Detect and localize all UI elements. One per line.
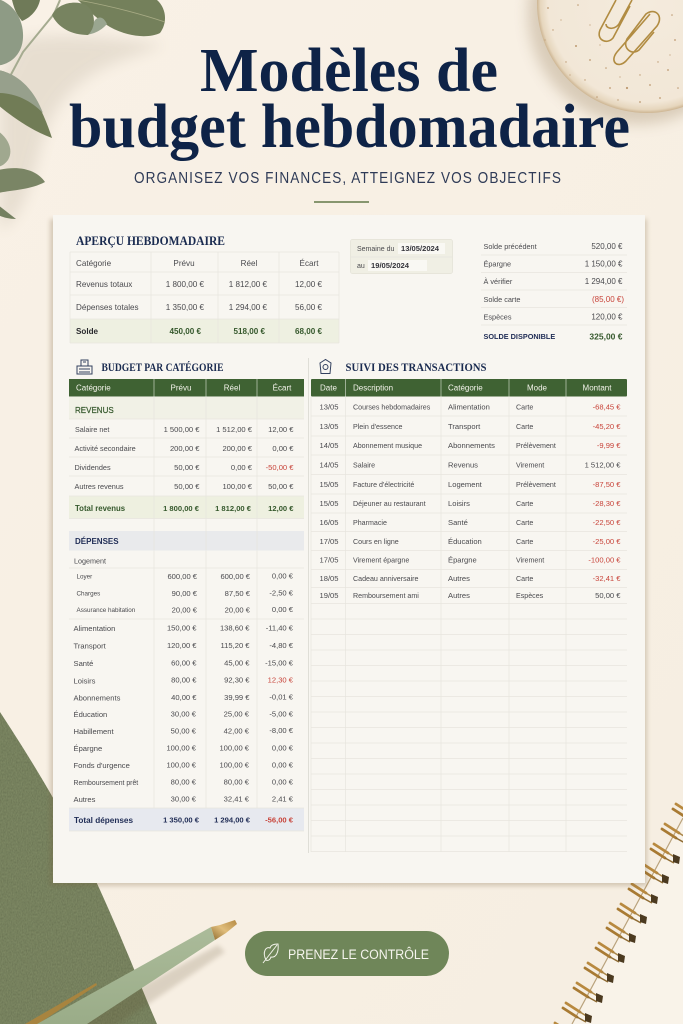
expenses section: 600,00 € [220,572,251,581]
expenses section: -2,50 € [269,588,294,598]
title: budget hebdomadaire [69,93,630,161]
revenue section: 0,00 € [231,463,253,472]
balance summary: 120,00 € [591,312,623,322]
transactions rows: Carte [516,404,533,412]
expenses section: 100,00 € [219,744,250,752]
expenses section: DÉPENSES [75,537,119,546]
budget table header: Prévu [171,384,191,392]
balance summary: Solde carte [484,295,520,304]
call to action button [245,931,449,976]
transactions rows: Virement [516,556,544,564]
expenses section: -5,00 € [269,710,294,718]
overview table: 56,00 € [295,303,322,312]
expenses section: Remboursement prêt [74,780,138,787]
overview table: Dépenses totales [76,303,139,312]
icon: budget building [77,360,92,374]
balance summary [481,242,627,342]
overview table: 68,00 € [295,327,322,336]
transactions rows: -87,50 € [593,480,621,489]
overview table: 1 294,00 € [229,303,267,312]
expenses section: Transport [74,642,107,650]
expenses section: -0,01 € [269,692,294,702]
expenses section: 20,00 € [172,606,198,614]
transactions rows: 13/05 [320,402,339,412]
transactions rows: Courses hebdomadaires [353,404,431,412]
expenses section: 45,00 € [224,658,250,668]
expenses section: 600,00 € [167,572,198,581]
overview table: 450,00 € [169,327,201,336]
paper sheet [50,215,647,886]
transactions rows: 50,00 € [595,591,621,600]
transactions rows: Alimentation [448,402,490,412]
transactions rows: Épargne [448,556,477,564]
revenue section: 12,00 € [268,425,294,434]
expenses section: 30,00 € [171,710,197,718]
icon: house with coin [320,360,331,374]
week date box: Semaine du [357,246,394,253]
plate with paper clips [528,0,683,124]
transactions rows: -68,45 € [593,402,621,412]
expenses section: 1 294,00 € [214,816,251,824]
budget table header: Écart [273,384,292,392]
transactions rows: Déjeuner au restaurant [353,500,426,508]
expenses section: 138,60 € [220,624,250,632]
heading: budget par catégorie: BUDGET PAR CATÉGORIE [102,360,224,374]
expenses section: 100,00 € [166,760,197,770]
expenses section: 120,00 € [167,641,197,650]
expenses section: Abonnements [74,694,121,702]
transactions rows: Autres [448,591,470,600]
revenue section: 200,00 € [222,444,253,453]
budget table header: Catégorie [76,384,111,392]
transactions rows: 1 512,00 € [585,460,621,470]
transactions rows: -45,20 € [593,422,621,431]
transactions rows: Carte [516,575,533,583]
transactions rows: Prélèvement [516,481,556,489]
expenses section: 50,00 € [171,726,197,736]
revenue section: Dividendes [74,463,111,472]
transactions rows: 15/05 [320,480,339,489]
balance summary: 520,00 € [591,242,623,251]
expenses section: 0,00 € [272,760,294,770]
transactions rows: Pharmacie [353,519,387,527]
overview table: Prévu [173,259,195,268]
revenue section: 1 812,00 € [215,504,252,513]
expenses section: 92,30 € [224,676,250,684]
transactions rows: Prélèvement [516,442,556,450]
expenses section: 25,00 € [224,710,250,718]
budget table header: Réel [224,384,240,392]
expenses section: 150,00 € [167,624,197,632]
expenses section: 90,00 € [172,589,198,598]
transactions rows [320,402,621,600]
expenses section: Alimentation [74,624,115,633]
transactions rows: -32,41 € [593,574,621,583]
week date box: 13/05/2024 [401,244,440,253]
transactions grid [311,397,627,852]
revenue section: Activité secondaire [74,444,136,453]
balance summary: (85,00 €) [592,295,624,304]
transactions rows: Carte [516,423,533,431]
title [69,37,630,161]
transactions rows: Autres [448,574,470,583]
expenses section: 30,00 € [171,794,197,804]
revenue section: 1 500,00 € [164,425,200,434]
transactions header: Catégorie [448,384,483,392]
revenue section: 1 800,00 € [163,504,200,513]
expenses section: Santé [74,659,93,668]
transactions rows: 17/05 [320,537,339,546]
transactions rows: -28,30 € [593,499,621,508]
transactions rows: Transport [448,422,481,431]
expenses section: 0,00 € [272,778,294,786]
pen [25,920,237,1024]
transactions rows: 14/05 [320,441,339,450]
expenses section: Éducation [74,710,107,719]
transactions rows: Éducation [448,537,482,546]
revenue section: 12,00 € [268,504,294,513]
transactions rows: -9,99 € [597,441,621,450]
transactions rows: 17/05 [320,556,339,564]
transactions rows: Virement [516,462,544,470]
transactions rows: 18/05 [320,574,339,583]
button label: PRENEZ LE CONTRÔLE [288,947,429,962]
eucalyptus leaves [0,0,165,230]
revenue section: REVENUS [75,406,114,415]
revenue section: 50,00 € [174,463,200,472]
expenses section: Fonds d'urgence [74,761,130,770]
expenses section: Total dépenses [74,816,133,825]
transactions rows: Cours en ligne [353,538,399,546]
transactions rows: Espèces [516,592,544,600]
transactions rows: Plein d'essence [353,423,403,431]
expenses section: 42,00 € [224,726,250,736]
balance summary: SOLDE DISPONIBLE [484,332,555,341]
transactions rows: -22,50 € [593,518,621,527]
transactions rows: Loisirs [448,499,470,508]
overview table: Solde [76,327,99,336]
revenue section: 100,00 € [222,482,253,491]
expenses section: 1 350,00 € [163,816,200,824]
balance summary: Espèces [484,312,512,322]
expenses section: -4,80 € [269,641,294,650]
overview table: 1 350,00 € [166,303,204,312]
expenses section: 115,20 € [220,641,250,650]
expenses section: 87,50 € [225,589,251,598]
icon: leaf [263,944,278,963]
transactions rows: Santé [448,518,468,527]
expenses section: 32,41 € [224,794,250,804]
panel: weekly overview [70,233,339,343]
transactions rows: Carte [516,519,533,527]
expenses section: Épargne [74,744,102,753]
expenses section: 80,00 € [171,778,197,786]
overview table: Catégorie [76,259,112,268]
balance summary: Solde précédent [484,242,537,251]
transactions header: Montant [583,384,612,392]
spiral notebook [552,804,683,1024]
expenses section: -56,00 € [265,816,294,824]
revenue section: -50,00 € [266,463,294,472]
overview table: Revenus totaux [76,280,132,289]
week date box: 19/05/2024 [371,261,410,270]
transactions rows: 15/05 [320,499,339,508]
transactions rows: Carte [516,538,533,546]
transactions rows: Carte [516,500,533,508]
revenue section: Total revenus [75,504,126,513]
transactions rows: 14/05 [320,460,339,470]
transactions rows: Remboursement ami [353,592,419,600]
expenses section: Loisirs [74,676,96,686]
heading: suivi des transactions: SUIVI DES TRANSACTIONS [346,362,486,374]
revenue section: Autres revenus [74,482,124,491]
expenses section: Loyer [76,574,92,580]
expenses section: 2,41 € [272,794,294,804]
heading: aperçu hebdomadaire: APERÇU HEBDOMADAIRE [76,233,225,248]
overview table: 12,00 € [295,280,322,289]
expenses section: Autres [74,795,96,804]
revenue section: 1 512,00 € [216,425,253,434]
transactions rows: -25,00 € [593,537,621,546]
expenses section: 60,00 € [171,658,197,668]
expenses section: Charges [76,590,100,598]
balance summary: 325,00 € [589,332,623,342]
revenue section: 50,00 € [268,482,294,491]
revenue section [69,397,304,831]
expenses section: 0,00 € [272,572,294,580]
overview table [70,252,339,343]
transactions rows: Revenus [448,460,478,470]
overview table: 1 812,00 € [229,280,267,289]
transactions rows: Abonnement musique [353,442,422,450]
title divider [314,201,369,203]
transactions rows: Cadeau anniversaire [353,575,419,583]
transactions rows: Facture d'électricité [353,481,414,489]
overview table: Écart [300,259,319,268]
transactions rows: -100,00 € [588,556,621,564]
expenses section: 100,00 € [219,760,250,770]
transactions rows: Logement [448,480,483,489]
expenses section: 40,00 € [171,693,197,702]
revenue section: 0,00 € [272,444,294,453]
transactions rows: 16/05 [320,518,339,527]
expenses section: 12,30 € [268,676,294,684]
expenses section: 0,00 € [272,744,294,752]
expenses section: -8,00 € [269,726,294,735]
expenses section: Logement [74,556,106,566]
transactions rows: 19/05 [320,591,339,600]
week date box [350,240,452,274]
green cloth folder [0,712,157,1024]
transactions rows: Abonnements [448,441,495,450]
week date box: au [357,263,365,270]
balance summary: 1 150,00 € [585,260,623,268]
expenses section: 20,00 € [225,606,251,614]
expenses section [69,531,304,831]
overview table: 518,00 € [233,327,265,336]
overview table: Réel [241,259,258,268]
subtitle: ORGANISEZ VOS FINANCES, ATTEIGNEZ VOS OBJECTIFS [134,170,562,187]
balance summary: 1 294,00 € [585,277,623,286]
title: Modèles de [200,37,498,105]
transactions header: Mode [527,384,548,392]
balance summary: Épargne [484,260,511,268]
expenses section: 80,00 € [171,676,197,684]
transactions header: Date [320,384,337,392]
revenue section: 200,00 € [170,444,200,453]
transactions rows: Salaire [353,462,375,470]
transactions header: Description [353,384,393,392]
panel: transaction tracker [308,358,627,853]
revenue section: Salaire net [75,425,109,434]
expenses section: -11,40 € [266,624,294,632]
overview table: 1 800,00 € [166,280,204,289]
transactions rows: 13/05 [320,422,339,431]
expenses section: 80,00 € [224,778,250,786]
expenses section: 39,99 € [224,693,250,702]
budget table header [69,379,304,396]
revenue section: 50,00 € [174,482,200,491]
transactions header [311,379,627,396]
balance summary: À vérifier [484,277,513,286]
transactions rows: Virement épargne [353,556,409,564]
expenses section: 100,00 € [166,744,197,752]
expenses section: 0,00 € [272,605,294,614]
expenses section: Assurance habitation [76,607,136,614]
expenses section: Habillement [74,727,114,736]
expenses section: -15,00 € [265,658,294,668]
panel: budget by category [69,360,304,831]
